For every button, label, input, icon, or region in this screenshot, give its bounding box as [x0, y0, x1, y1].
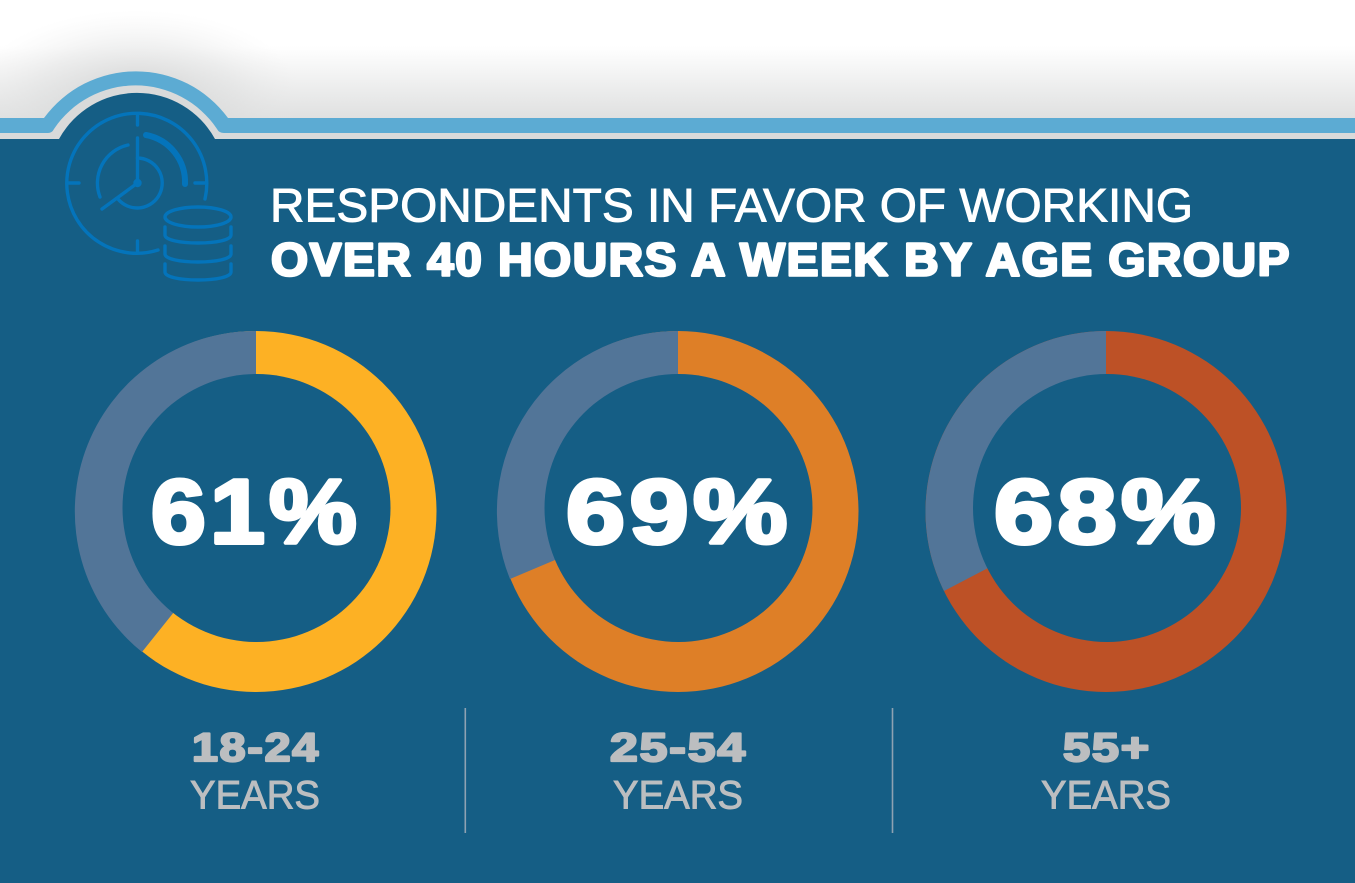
header band: light strip — [0, 85, 1355, 140]
title: OVER 40 HOURS A WEEK BY AGE GROUP — [271, 234, 1291, 286]
header band: blue arch — [0, 71, 1355, 133]
donut chart: 55+ years 68% — [926, 331, 1286, 692]
label: 25-54 years: 25-54 — [610, 726, 747, 770]
title — [270, 178, 1291, 286]
label: 18-24 years — [190, 726, 320, 818]
label: 25-54 years: YEARS — [613, 774, 743, 818]
donut chart: 18-24 years 61%: 61% — [151, 462, 361, 563]
donut chart: 55+ years 68%: 68% — [994, 462, 1220, 563]
label: 55+ years — [1041, 726, 1171, 818]
label: 18-24 years: YEARS — [190, 774, 320, 818]
label: 25-54 years — [610, 726, 747, 818]
label: 18-24 years: 18-24 — [192, 726, 320, 770]
label: 55+ years: 55+ — [1063, 726, 1151, 770]
donut chart: 25-54 years 69%: 69% — [566, 462, 792, 563]
title: RESPONDENTS IN FAVOR OF WORKING — [270, 178, 1193, 232]
donut chart: 18-24 years 61% — [75, 331, 437, 692]
label: 55+ years: YEARS — [1041, 774, 1171, 818]
top shadow — [0, 10, 1355, 180]
icon: clock and coin stack — [67, 113, 231, 280]
donut chart: 25-54 years 69% — [497, 331, 858, 692]
